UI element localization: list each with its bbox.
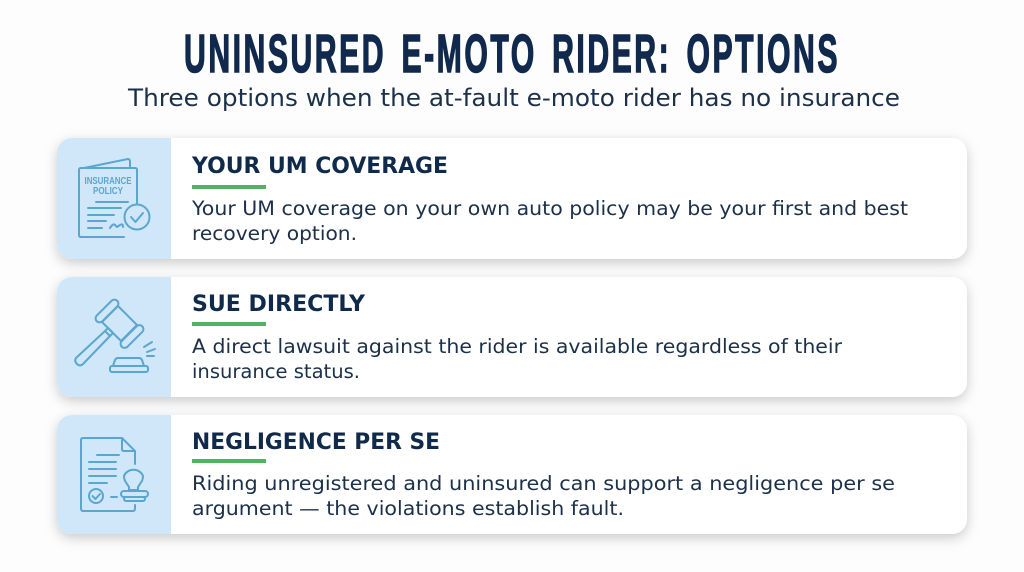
body text: recovery option. — [192, 222, 357, 245]
panel: your UM coverage — [57, 138, 967, 259]
body text: A direct lawsuit against the rider is available regardless of their — [192, 335, 843, 358]
body text: Riding unregistered and uninsured can support a negligence per se — [192, 472, 895, 495]
heading: NEGLIGENCE PER SE — [192, 430, 440, 455]
icon: document with stamp — [81, 438, 148, 511]
body text: Your UM coverage on your own auto policy may be your first and best — [191, 197, 908, 220]
green rule — [192, 185, 266, 189]
panel: sue directly — [57, 277, 967, 397]
panel: negligence per se — [57, 415, 967, 534]
icon: insurance policy: INSURANCE — [84, 176, 132, 187]
icon: insurance policy — [79, 159, 150, 237]
body text: insurance status. — [192, 360, 360, 383]
heading: YOUR UM COVERAGE — [191, 154, 448, 179]
heading: SUE DIRECTLY — [192, 292, 366, 317]
body text: argument — the violations establish fault. — [192, 497, 624, 520]
icon: insurance policy: POLICY — [93, 186, 123, 197]
icon: gavel — [75, 298, 155, 372]
green rule — [192, 322, 266, 326]
green rule — [192, 459, 266, 463]
subtitle: Three options when the at-fault e-moto rider has no insurance — [127, 84, 900, 112]
